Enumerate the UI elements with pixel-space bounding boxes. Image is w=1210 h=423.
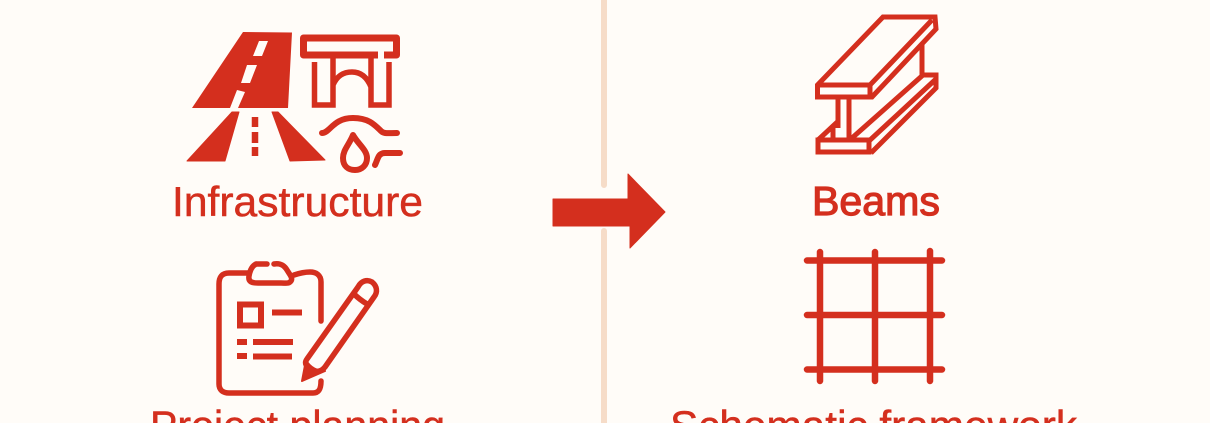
heading: Beams: Beams: [812, 178, 940, 224]
icon: pencil: [306, 281, 376, 371]
icon: checklist square: [240, 304, 261, 326]
icon: steel I-beam: [818, 17, 936, 153]
icon: checklist lines: [237, 312, 302, 356]
icon: road upper section: [192, 32, 292, 108]
icon: bottom flange: [818, 75, 936, 153]
icon: bridge piers and arch: [314, 58, 389, 105]
icon: road lower right lane: [272, 112, 325, 161]
heading: Infrastructure: Infrastructure: [172, 178, 423, 225]
icon: clipboard clip: [249, 264, 292, 283]
icon: pencil tip: [302, 360, 325, 381]
icon: road lower left lane: [187, 112, 239, 161]
icon: clipboard and pencil: [219, 264, 376, 393]
icon: top flange: [818, 17, 936, 97]
icon: web: [838, 44, 922, 140]
icon: road and bridge infrastructure: [187, 32, 400, 170]
icon: road centre dashes: [252, 117, 258, 156]
arrow: [553, 174, 665, 248]
icon: clipboard outline: [219, 272, 321, 393]
icon: bridge deck: [304, 38, 396, 55]
icon: water curve and drop: [322, 118, 400, 170]
icon: schematic grid: [807, 251, 942, 381]
